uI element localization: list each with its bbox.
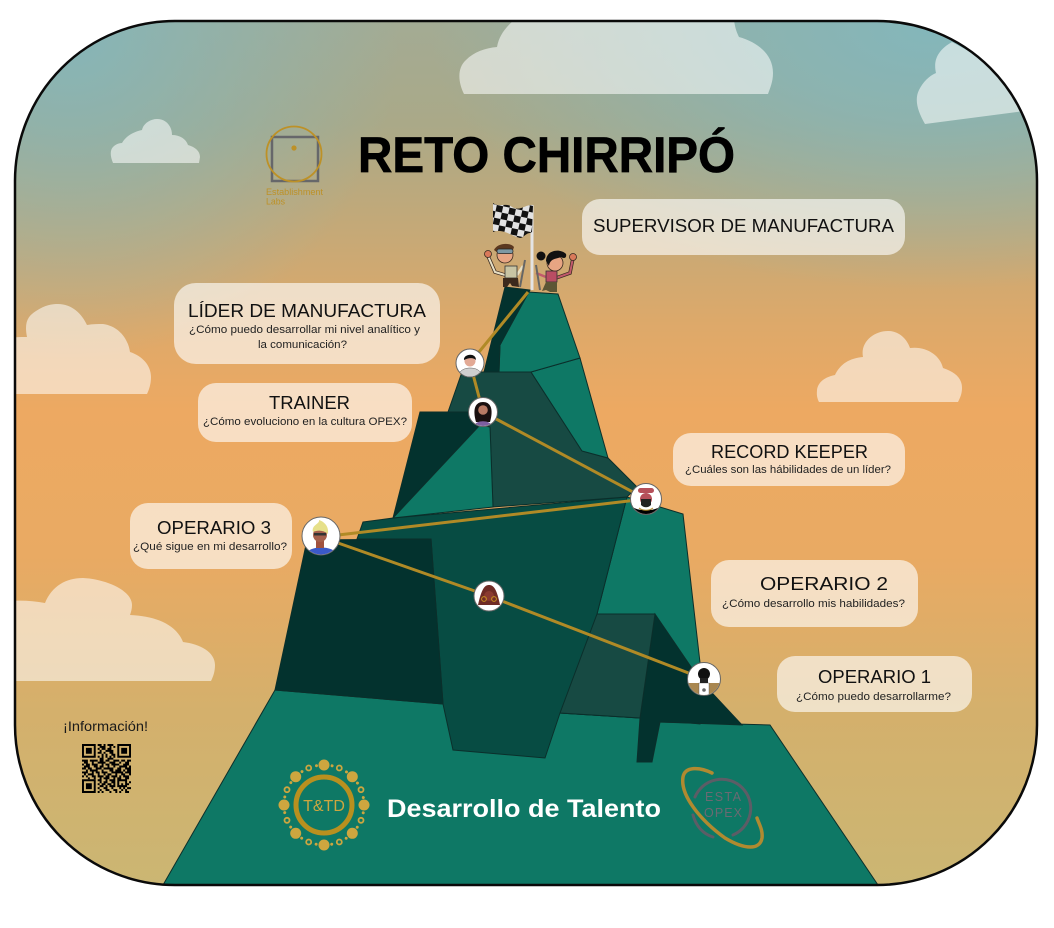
card: operario 3: OPERARIO 3 <box>157 517 271 538</box>
cloud: middle right <box>817 331 962 402</box>
climber left <box>484 244 525 287</box>
climber right <box>536 251 576 292</box>
card: trainer: TRAINER <box>269 392 350 413</box>
card: operario 1: ¿Cómo puedo desarrollarme? <box>796 691 951 703</box>
flag <box>493 203 534 290</box>
upper dark facet <box>393 412 480 518</box>
card: supervisor de manufactura <box>582 199 905 255</box>
card: operario 2: ¿Cómo desarrollo mis habilidades? <box>722 598 905 610</box>
right teal face <box>560 497 702 724</box>
peak dark <box>484 287 530 372</box>
avatar: operario 1 <box>688 662 720 697</box>
route line <box>321 292 704 679</box>
mountain base <box>163 690 878 885</box>
teal side facet <box>531 358 608 458</box>
avatars <box>302 349 720 697</box>
logo: Establishment Labs: Establishment <box>266 187 323 198</box>
clouds <box>10 20 1040 681</box>
logo: T&TD <box>277 758 371 852</box>
card: record keeper: ¿Cuáles son las hábilidades de un líder? <box>685 464 891 476</box>
footer heading: Desarrollo de Talento <box>387 795 661 823</box>
card: operario 1: OPERARIO 1 <box>818 666 931 687</box>
cloud: middle left <box>10 304 151 394</box>
cloud: small top left <box>111 119 200 163</box>
logo: Establishment Labs <box>266 126 323 208</box>
mountain <box>163 287 878 885</box>
card: operario 3: ¿Qué sigue en mi desarrollo? <box>133 541 287 553</box>
lighter slab <box>560 614 655 718</box>
peak teal <box>499 292 580 372</box>
logo: Establishment Labs: Labs <box>266 196 285 208</box>
cloud: lower left <box>10 578 215 681</box>
central face <box>357 497 627 758</box>
card: lider de manufactura <box>174 283 440 364</box>
logo: T&TD: T&TD <box>303 798 345 815</box>
card: record keeper <box>673 433 905 486</box>
upper teal facet <box>393 425 493 518</box>
card: record keeper: RECORD KEEPER <box>711 441 868 462</box>
logo: ESTA OPEX: OPEX <box>704 806 743 820</box>
card: operario 2: OPERARIO 2 <box>760 573 888 594</box>
cloud: top center <box>459 20 773 94</box>
QR code <box>82 745 131 792</box>
card: lider de manufactura: LÍDER DE MANUFACTURA <box>188 300 427 321</box>
card: trainer: ¿Cómo evoluciono en la cultura OPEX? <box>203 416 407 428</box>
card: operario 3 <box>130 503 292 569</box>
cloud: top right <box>916 42 1020 124</box>
avatar: trainer <box>468 398 498 428</box>
card: lider de manufactura: ¿Cómo puedo desarrollar mi nivel analítico y <box>189 324 421 336</box>
logo: ESTA OPEX: ESTA <box>705 790 742 804</box>
flag pole <box>530 205 534 290</box>
card: supervisor de manufactura: SUPERVISOR DE MANUFACTURA <box>593 215 895 236</box>
information label: ¡Información! <box>63 719 148 734</box>
card: trainer <box>198 383 412 442</box>
card: lider de manufactura: la comunicación? <box>258 339 347 351</box>
dark right ridge <box>637 614 742 762</box>
checkered cloth <box>493 203 533 238</box>
dark left face <box>275 539 443 704</box>
card: operario 1 <box>777 656 972 712</box>
avatar: operario 3 <box>302 517 340 555</box>
avatar: record keeper <box>630 484 662 516</box>
avatar: lider de manufactura <box>456 349 484 378</box>
title: RETO CHIRRIPÓ <box>358 127 735 183</box>
logo: ESTA OPEX <box>683 769 762 847</box>
avatar: operario intermedio <box>474 581 504 611</box>
upper band <box>448 372 637 507</box>
climbers <box>484 244 576 292</box>
card: operario 2 <box>711 560 918 627</box>
